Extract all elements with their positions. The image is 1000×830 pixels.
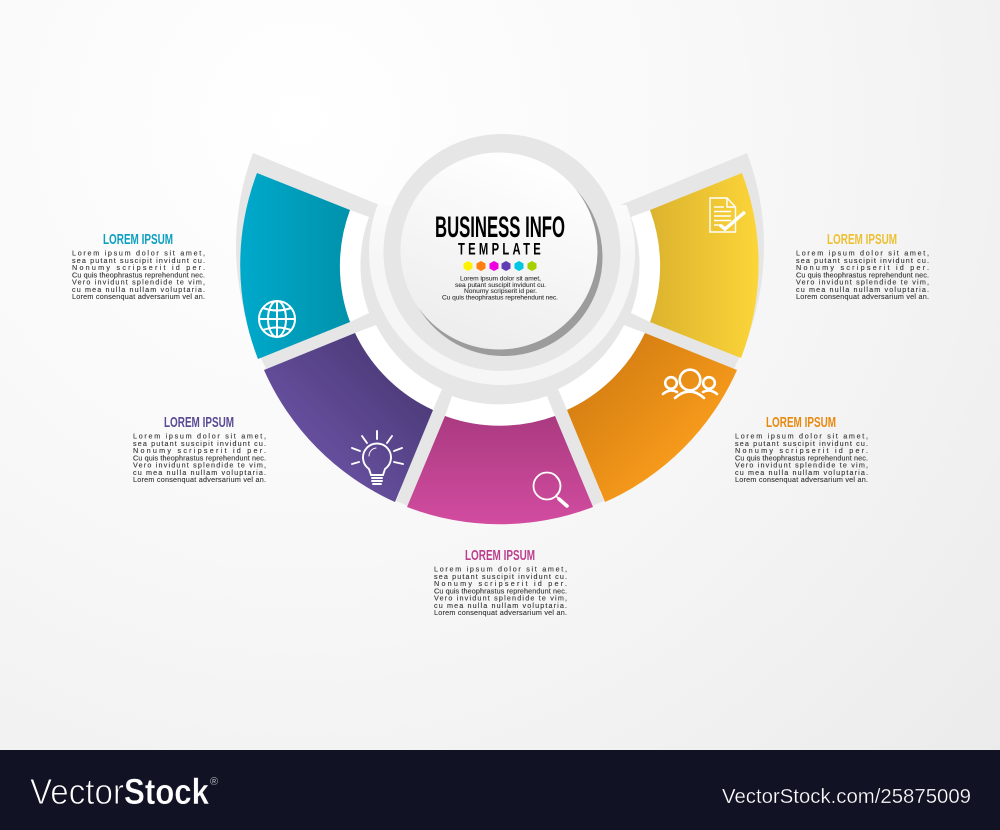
text block: teal: Lorem ipsum dolor sit amet, [72,248,205,258]
text block: orange: sea putant suscipit invidunt cu. [735,439,868,448]
text block: orange: Lorem consenquat adversarium vel an. [735,475,868,484]
footer logo [30,771,218,812]
segment: purple with light bulb icon [264,333,433,502]
text block: yellow [796,231,929,301]
text block: purple: sea putant suscipit invidunt cu. [133,439,266,448]
text block: yellow: Lorem ipsum dolor sit amet, [796,248,929,258]
central title: TEMPLATE [458,240,544,258]
grey semicircular frame [236,153,764,510]
text block: magenta: Lorem ipsum dolor sit amet, [434,564,567,574]
text block: teal: Vero invidunt splendide te vim, [72,278,205,287]
central description: sea putant suscipit invidunt cu. [455,282,546,289]
text block: magenta: cu mea nulla nullam voluptaria. [434,601,567,610]
text block: teal: Cu quis theophrastus reprehendunt nec. [72,270,205,279]
footer logo: Stock [124,771,210,812]
text block: purple: cu mea nulla nullam voluptaria. [133,468,266,477]
white inner band segments [340,210,660,426]
text block: purple [133,414,266,484]
central hub rings [369,119,635,385]
text block: teal: LOREM IPSUM [103,231,173,248]
text block: yellow: Nonumy scripserit id per. [796,263,929,272]
text block: teal: Nonumy scripserit id per. [72,263,205,272]
text block: orange: LOREM IPSUM [766,414,836,431]
text block: magenta: Nonumy scripserit id per. [434,579,567,588]
text block: teal: Lorem consenquat adversarium vel an. [72,292,205,301]
text block: yellow: sea putant suscipit invidunt cu. [796,256,929,265]
text block: purple: Nonumy scripserit id per. [133,446,266,455]
text block: yellow: Cu quis theophrastus reprehendunt nec. [796,270,929,279]
text block: yellow: Lorem consenquat adversarium vel an. [796,292,929,301]
text block: magenta: Cu quis theophrastus reprehendunt nec. [434,586,567,595]
text block: magenta: sea putant suscipit invidunt cu. [434,572,567,581]
text block: purple: Cu quis theophrastus reprehendunt nec. [133,453,266,462]
text block: purple: Lorem ipsum dolor sit amet, [133,432,266,440]
segment: magenta with magnifier icon [407,416,593,524]
text block: yellow: Vero invidunt splendide te vim, [796,278,929,287]
central description [442,276,558,302]
central description: Nonumy scripserit id per. [464,288,537,295]
text block: teal: cu mea nulla nullam voluptaria. [72,285,205,294]
footer logo: ® [210,776,218,788]
text block: purple: Lorem consenquat adversarium vel an. [133,475,266,484]
text block: teal: sea putant suscipit invidunt cu. [72,256,205,265]
icon: globe [259,301,295,337]
text block: orange: Nonumy scripserit id per. [735,446,868,455]
text block: yellow: cu mea nulla nullam voluptaria. [796,285,929,294]
central description: Lorem ipsum dolor sit amet, [460,276,541,282]
text block: orange [735,414,868,484]
central title: BUSINESS INFO [435,211,565,244]
icon: people [663,370,717,398]
text block: orange: Lorem ipsum dolor sit amet, [735,432,868,440]
text block: magenta: Vero invidunt splendide te vim, [434,594,567,603]
text block: purple: LOREM IPSUM [164,414,234,431]
text block: yellow: LOREM IPSUM [827,231,897,248]
footer bar [0,750,1000,830]
text block: orange: Cu quis theophrastus reprehendunt nec. [735,453,868,462]
segment: teal with globe icon [240,173,350,359]
segment: yellow with document icon [650,173,759,358]
coloured hexagons row [464,261,536,271]
text block: teal [72,231,205,301]
icon: document with check [710,198,745,232]
segment: orange with people icon [567,333,737,502]
icon: light bulb [352,431,403,484]
central title [435,211,565,258]
text block: orange: Vero invidunt splendide te vim, [735,461,868,470]
footer url: VectorStock.com/25875009 [722,785,971,808]
central description: Cu quis theophrastus reprehendunt nec. [442,294,558,302]
text block: purple: Vero invidunt splendide te vim, [133,461,266,470]
text block: magenta: Lorem consenquat adversarium vel an. [434,608,567,617]
text block: magenta: LOREM IPSUM [465,547,535,564]
icon: magnifier [534,472,567,506]
text block: orange: cu mea nulla nullam voluptaria. [735,468,868,477]
footer logo: Vector [30,771,124,812]
text block: magenta [434,547,567,617]
